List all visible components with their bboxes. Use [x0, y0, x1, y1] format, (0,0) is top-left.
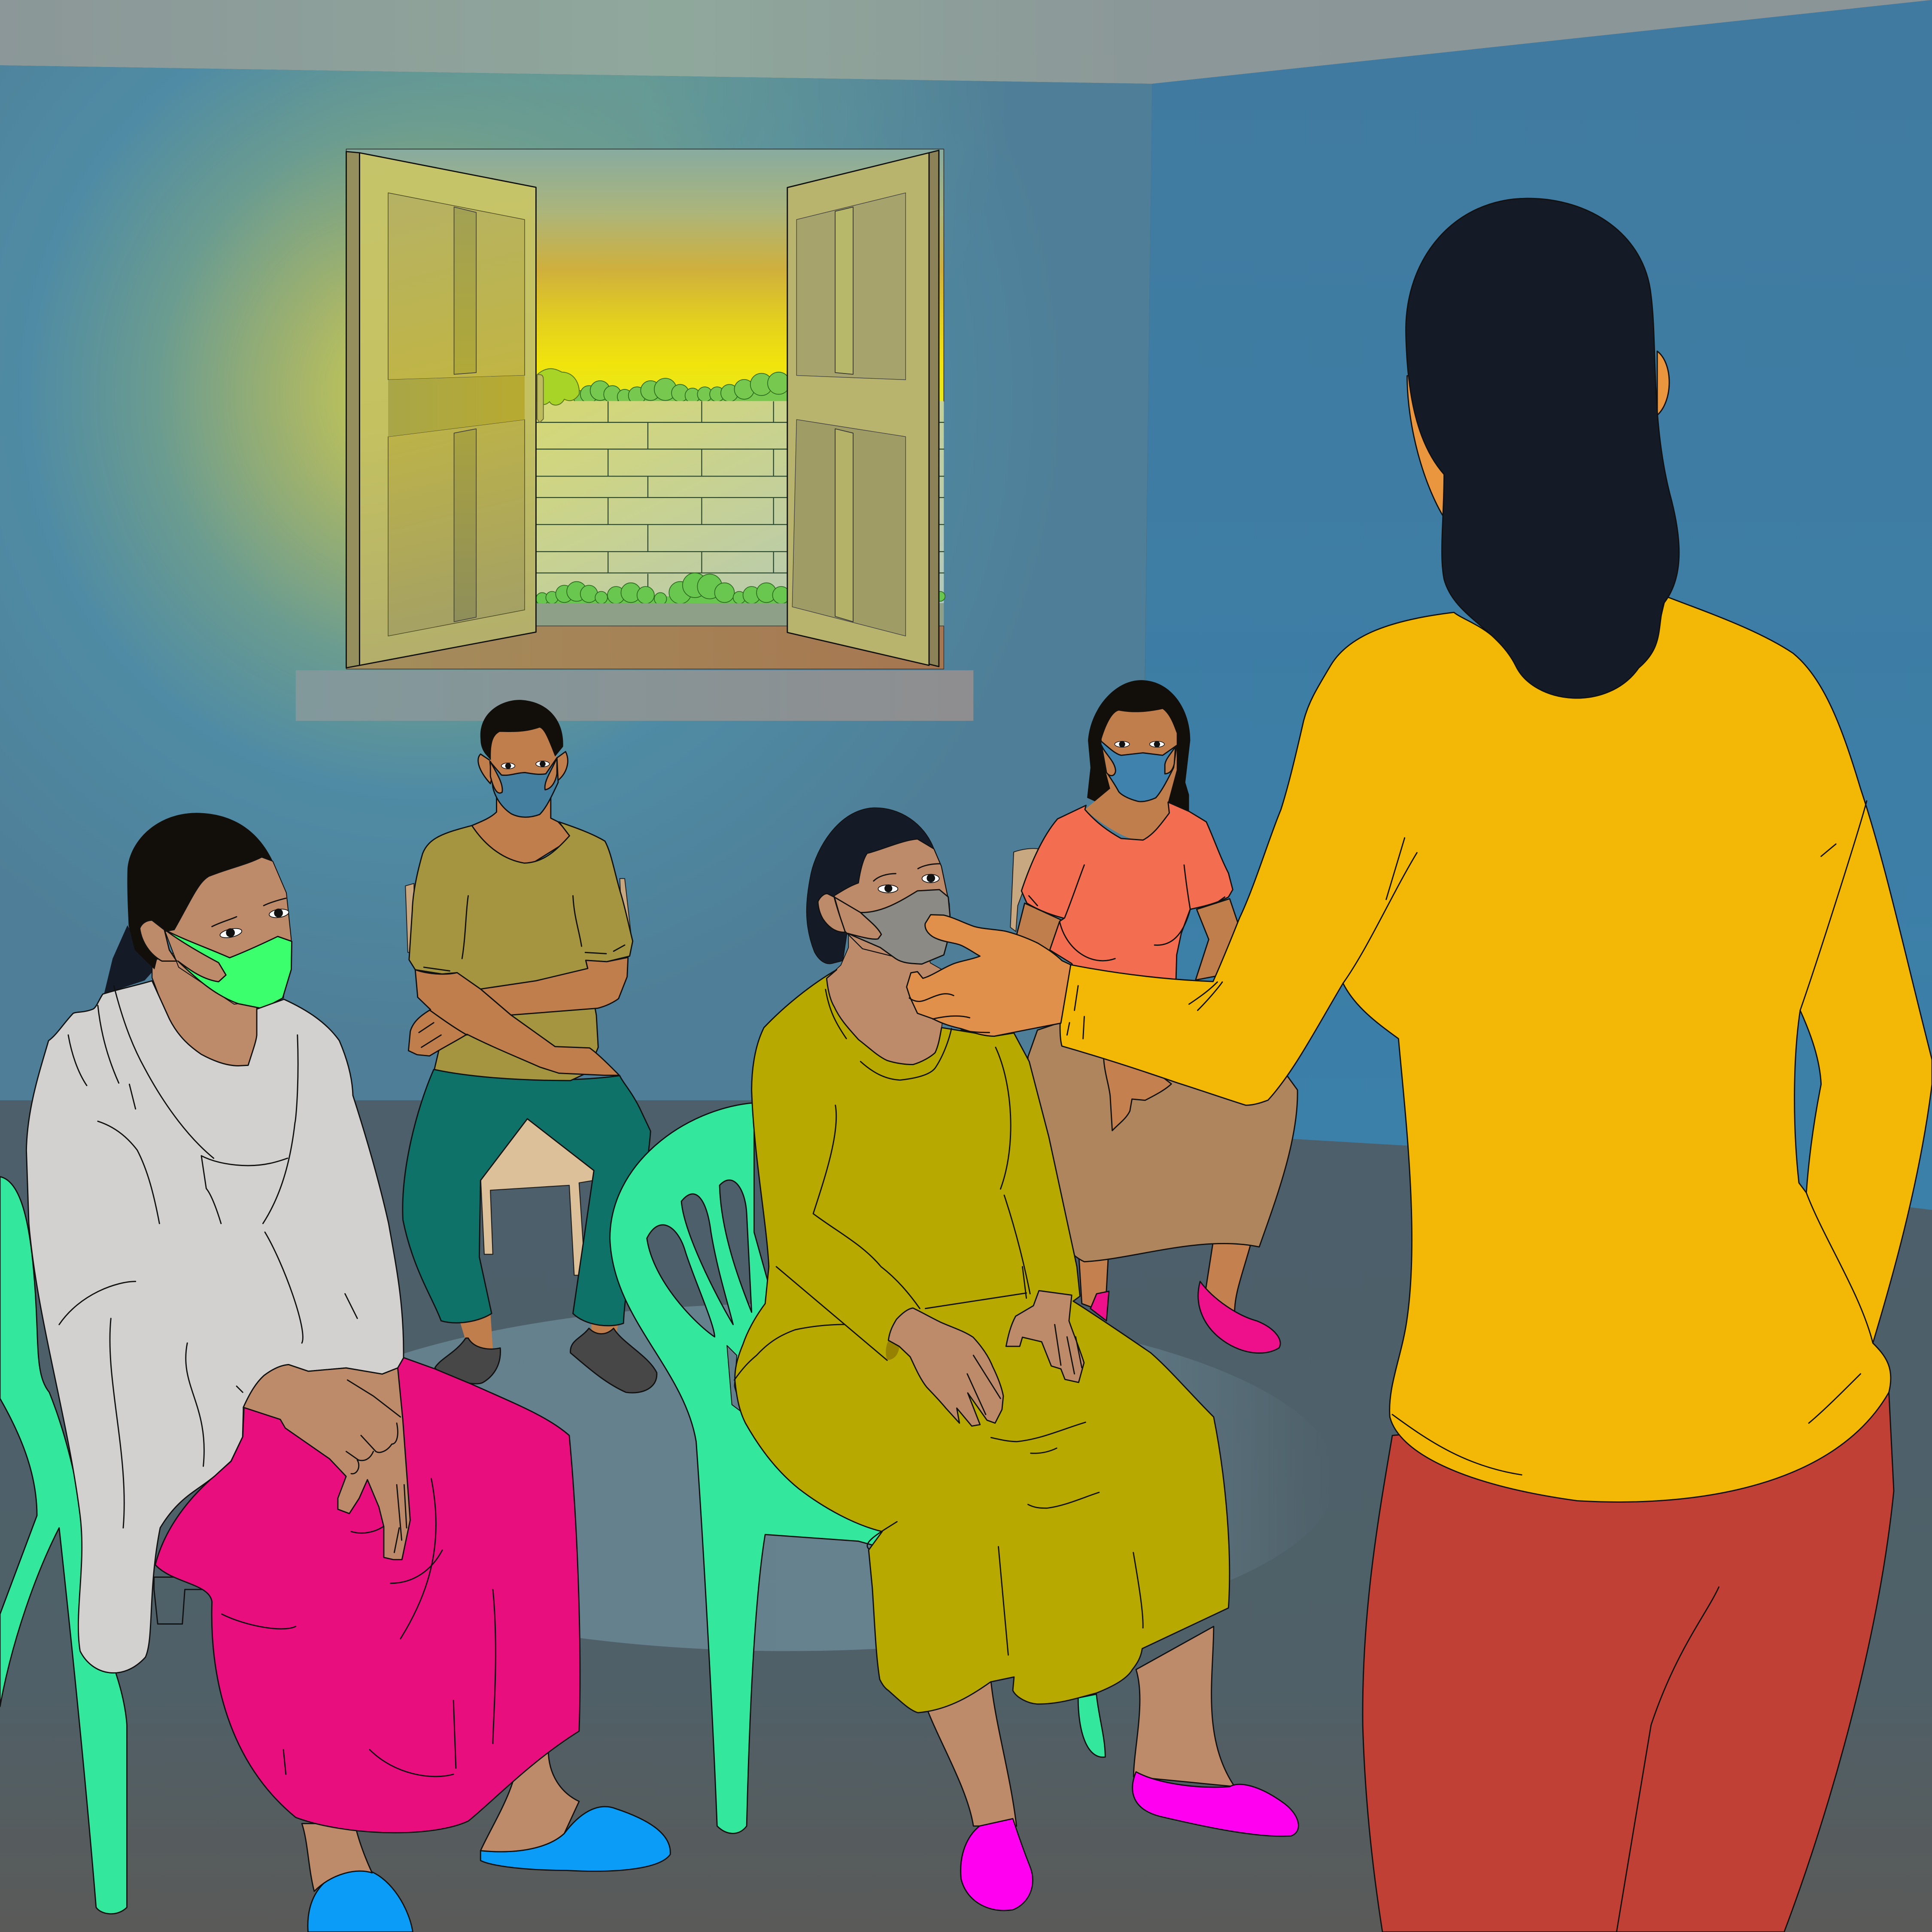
seated woman in coral top: [1008, 680, 1297, 1353]
eyes: [219, 908, 289, 939]
legs: [1078, 1238, 1251, 1312]
window sill: [296, 670, 973, 721]
crossed arms: [480, 957, 628, 1015]
sleeve wrinkles: [424, 896, 625, 971]
woman in white shawl and pink skirt: [26, 813, 670, 1932]
hair back: [104, 925, 155, 994]
mask cheek cut-outs: [1102, 745, 1176, 776]
red trousers: [1363, 1392, 1894, 1932]
tan skirt: [1025, 1023, 1297, 1262]
back chair: [405, 878, 631, 1275]
standing woman seen from behind: [907, 198, 1932, 1932]
neck and chest: [472, 795, 573, 869]
grey mask: [834, 890, 950, 964]
left hand on lap: [888, 1308, 1003, 1426]
blue mask: [1100, 741, 1177, 802]
ankles: [457, 1312, 620, 1349]
white shawl: [26, 981, 404, 1673]
view: ground: [346, 603, 944, 669]
left shutter: [346, 152, 536, 668]
skin of face and neck: [1085, 709, 1177, 840]
right shutter: [787, 150, 939, 667]
shoes: [435, 1338, 501, 1384]
centre green chair: [610, 1103, 1105, 1833]
neck and chest: [152, 949, 257, 1066]
chair rear leg: [1078, 1694, 1105, 1757]
eyebrows: [874, 864, 940, 881]
head: [165, 857, 291, 1004]
window: [296, 149, 973, 721]
hair: [480, 700, 563, 760]
pointing hand: [907, 915, 1071, 1036]
blue slippers: [308, 1868, 413, 1932]
right hand on lap: [1006, 1291, 1084, 1382]
blue mask: [490, 758, 558, 817]
ear: [818, 893, 845, 932]
dress: [735, 970, 1230, 1713]
dress fold lines: [734, 990, 1143, 1655]
eyes: [878, 874, 939, 893]
hands: [1103, 1055, 1171, 1130]
trousers: [403, 1069, 650, 1326]
magenta shoes: [961, 1772, 1298, 1911]
ears: [478, 752, 568, 784]
long dark hair: [1406, 198, 1679, 698]
legs: [924, 1626, 1235, 1826]
chair back: [1010, 848, 1039, 932]
pink skirt: [155, 1358, 580, 1833]
head: [489, 727, 558, 813]
shirt: [409, 822, 633, 1081]
eyes: [501, 761, 550, 769]
view: bottom bushes: [536, 573, 945, 605]
floor seen through chair: [727, 1346, 742, 1412]
view: left bush and handle: [537, 369, 579, 422]
eyes: [1115, 741, 1164, 747]
yellow sweater: [1060, 596, 1932, 1502]
left green chair: [0, 1177, 210, 1914]
hands on knee: [243, 1364, 410, 1560]
legs: [302, 1750, 579, 1891]
shawl fold lines: [59, 986, 357, 1528]
coral top: [1021, 802, 1233, 986]
sweater fold lines: [1067, 801, 1873, 1475]
gap between arm and torso: [1795, 1010, 1821, 1193]
central woman in mustard dress: [734, 808, 1298, 1911]
eyebrows: [212, 898, 286, 927]
view: top bushes: [573, 372, 790, 404]
mask cheek cut-outs: [490, 758, 557, 793]
green mask: [166, 930, 292, 1009]
shirt fold lines: [1029, 865, 1225, 961]
ear and face sliver: [1407, 351, 1669, 524]
neck: [826, 930, 949, 1065]
ear: [140, 920, 177, 961]
hair: [807, 808, 934, 964]
head: [834, 839, 950, 961]
cuff shadow: [886, 1340, 899, 1360]
hair: [1087, 680, 1190, 811]
shoes: [1091, 1282, 1280, 1353]
arms: [1008, 899, 1238, 986]
man seated at back: [403, 700, 657, 1393]
view: brick wall: [536, 401, 944, 603]
hair: [127, 813, 273, 969]
